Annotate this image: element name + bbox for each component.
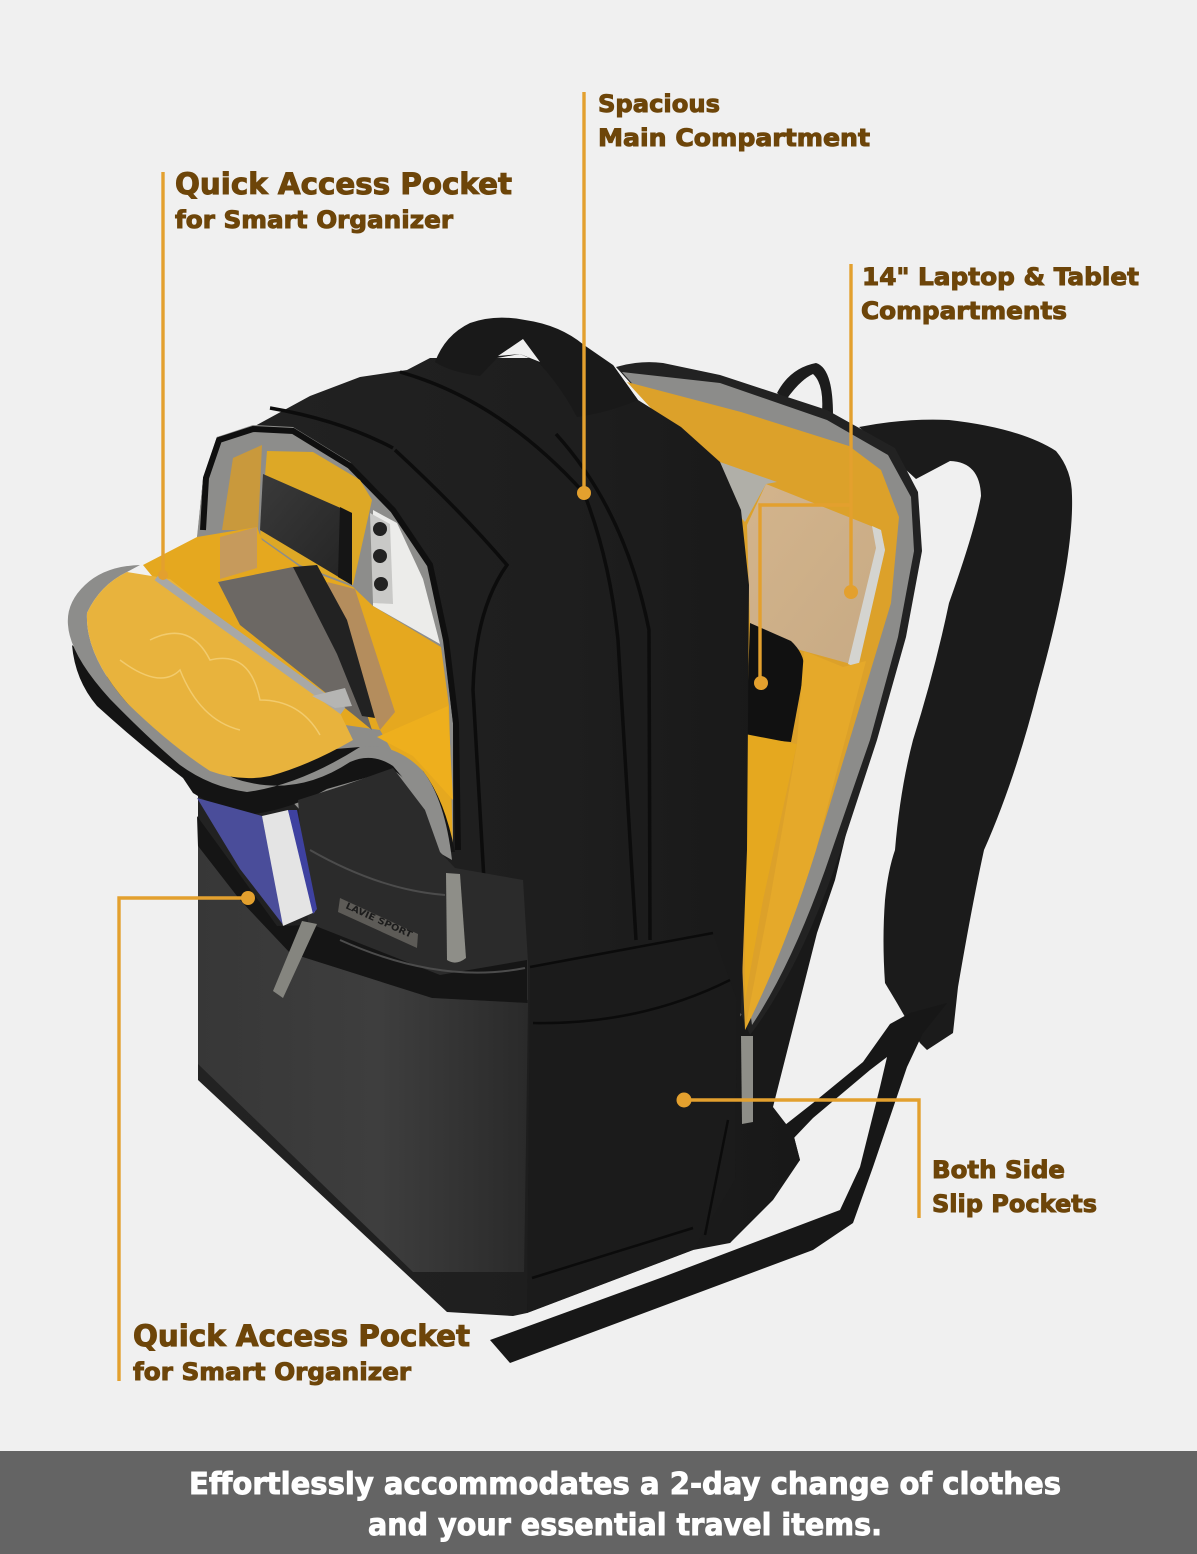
flap (68, 565, 455, 860)
callout: quick access pocket top (158, 167, 512, 580)
lower pocket leather (198, 846, 528, 1272)
leader line (577, 92, 591, 500)
left yellow side (222, 445, 262, 530)
pocket rim (197, 425, 453, 850)
book spine (288, 810, 317, 914)
heading: Quick Access Pocket (133, 1319, 470, 1353)
brand tag (338, 898, 418, 948)
lower front pocket (197, 768, 753, 1272)
zipper band (197, 816, 527, 1003)
callout: side slip pockets: Slip Pockets (932, 1190, 1097, 1218)
front panel seams (270, 372, 650, 940)
shoulder strap (859, 420, 1072, 1050)
callout: quick access pocket bottom (119, 891, 470, 1386)
grey sleeve (720, 462, 777, 522)
lower strap webbing (490, 1003, 947, 1363)
callout: main compartment: Main Compartment (598, 124, 870, 152)
book pages (262, 810, 315, 926)
leather stitch (310, 850, 525, 973)
leader line (676, 1092, 919, 1218)
yellow lining (627, 382, 899, 1030)
backpack illustration (68, 318, 1072, 1363)
subheading: for Smart Organizer (133, 1358, 411, 1386)
callout: laptop and tablet (754, 263, 1139, 690)
yellow inner sleeve (745, 734, 797, 1000)
flap outer grey (68, 565, 452, 860)
callout: laptop and tablet: Compartments (861, 297, 1067, 325)
label: 14" Laptop & Tablet (862, 263, 1139, 291)
main body (197, 358, 800, 1316)
zipper pull (312, 688, 352, 708)
open main compartment (616, 362, 922, 1035)
leader lines (754, 264, 858, 690)
leader line (119, 891, 255, 1381)
yellow lower lining (745, 651, 866, 1030)
flap pattern (120, 633, 320, 735)
banner text: Effortlessly accommodates a 2-day change of clothes (189, 1467, 1061, 1502)
zipper edge (203, 429, 458, 850)
leader line (158, 172, 168, 580)
top back loop (777, 363, 833, 415)
smartphone (370, 513, 393, 604)
power bank (260, 474, 352, 585)
bottom banner: and your essential travel items. (368, 1508, 882, 1543)
flap yellow lining (87, 572, 353, 778)
label: Both Side (932, 1156, 1065, 1184)
callout: side slip pockets (676, 1092, 1097, 1218)
yellow top lining (260, 451, 372, 585)
callout: main compartment (577, 90, 870, 500)
phone (746, 623, 804, 742)
heading: Quick Access Pocket (175, 167, 512, 201)
label: Spacious (598, 90, 720, 118)
rear mesh panel (730, 650, 890, 1243)
side slip pocket (527, 933, 737, 1313)
flap dark underside (72, 645, 455, 852)
beige shadow panel (220, 527, 257, 579)
subheading: for Smart Organizer (175, 206, 453, 234)
white laptop edge (373, 510, 440, 644)
brand tag: LAVIE SPORT (344, 902, 414, 941)
compartment rim (616, 362, 922, 1035)
handle gap (498, 339, 540, 362)
zipper pulls (446, 873, 466, 963)
bottom banner (0, 1451, 1197, 1554)
flap zipper (157, 577, 343, 711)
top handle (435, 318, 638, 417)
pocket front yellow (143, 527, 453, 850)
yellow fold (377, 706, 453, 800)
open front pocket interior (143, 425, 458, 850)
tablet (747, 484, 885, 666)
book (197, 798, 284, 926)
wallet (218, 567, 372, 730)
upper pocket panel (298, 768, 528, 1000)
